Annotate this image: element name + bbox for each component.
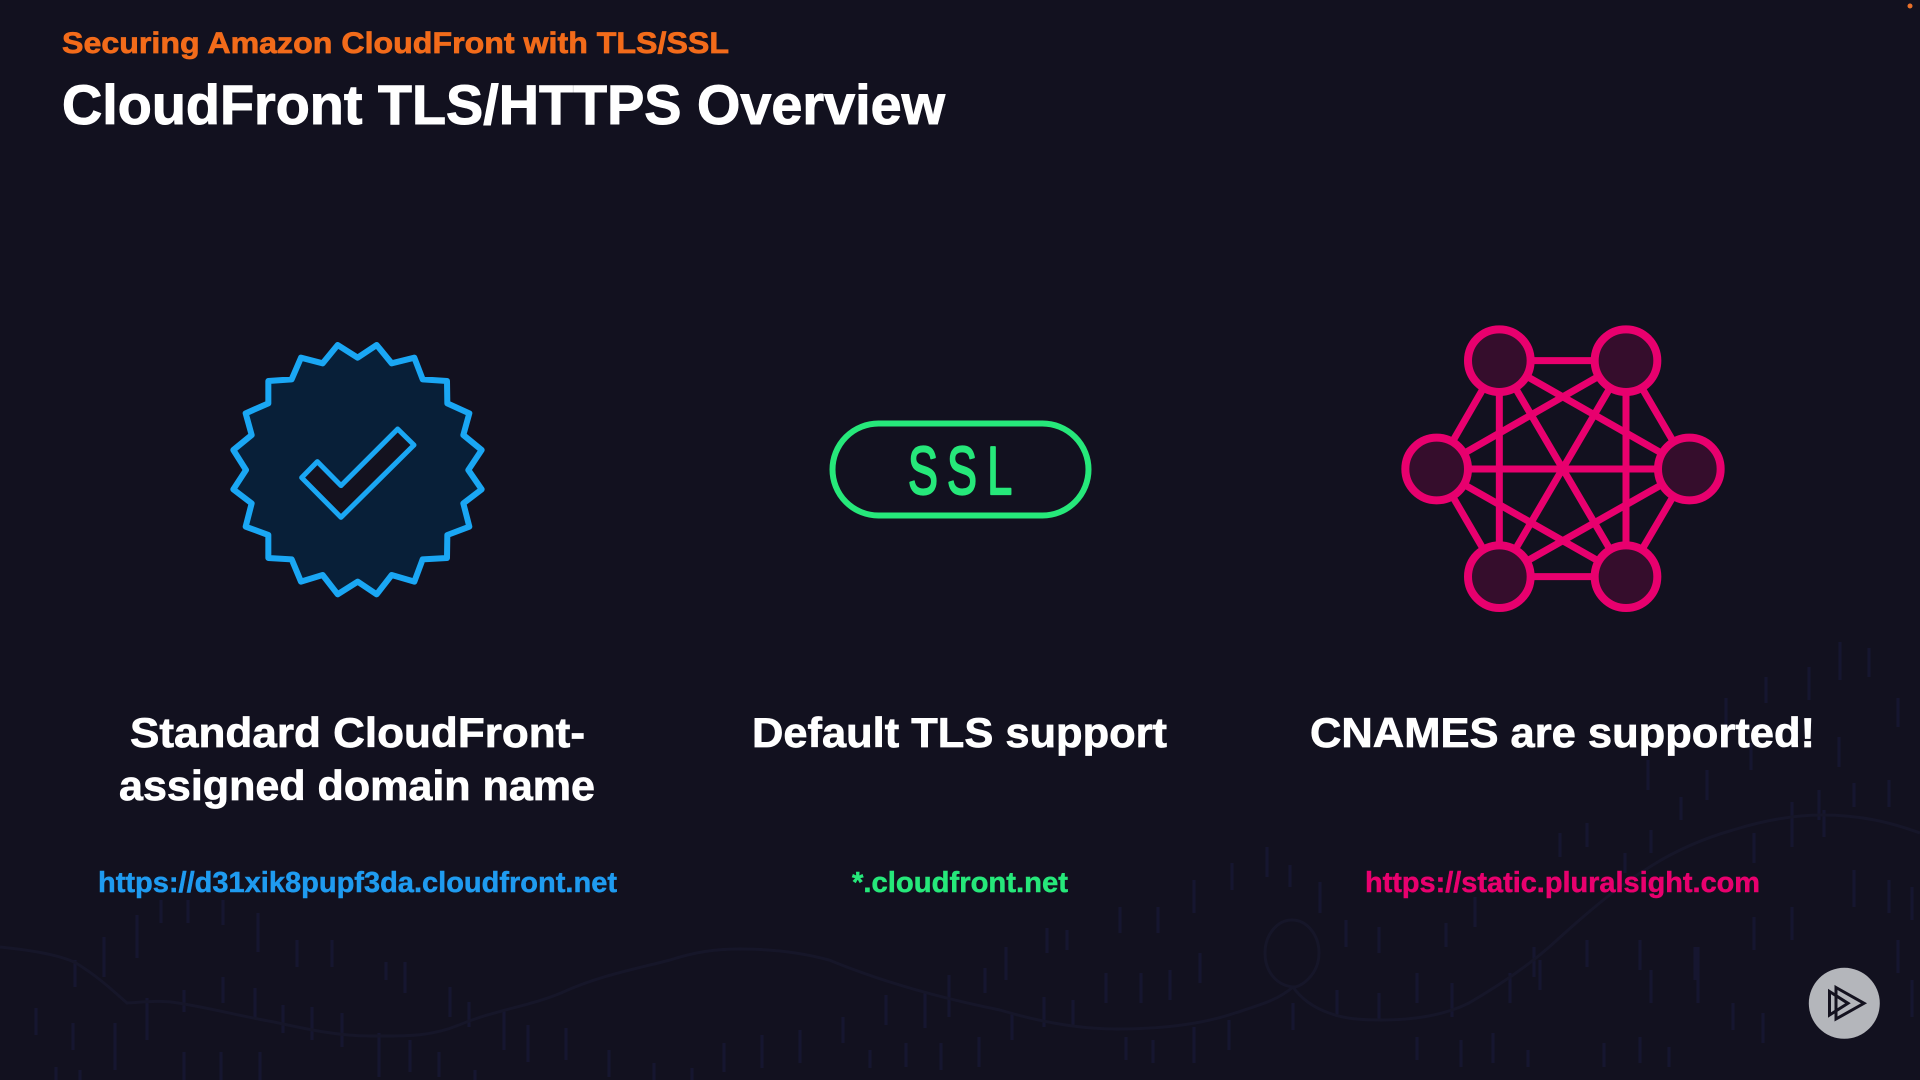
icon: play logo xyxy=(1809,968,1880,1039)
heading: standard domain xyxy=(119,709,595,809)
title: CloudFront TLS/HTTPS Overview xyxy=(62,73,945,136)
icon: check mark xyxy=(302,429,414,517)
heading: default TLS: Default TLS support xyxy=(752,709,1167,756)
icon: fully connected network xyxy=(1405,329,1721,608)
icon: SSL pill xyxy=(832,424,1088,516)
url: custom cname: https://static.pluralsight.com xyxy=(1365,867,1760,899)
heading: standard domain: assigned domain name xyxy=(119,762,595,809)
SSL label: SSL xyxy=(908,434,1012,509)
heading: CNAMES: CNAMES are supported! xyxy=(1310,709,1815,756)
subtitle: Securing Amazon CloudFront with TLS/SSL xyxy=(62,27,729,60)
icon: verified badge with check mark xyxy=(233,345,482,594)
url: wildcard: *.cloudfront.net xyxy=(852,867,1068,899)
heading: standard domain: Standard CloudFront- xyxy=(130,709,585,756)
url: cloudfront domain: https://d31xik8pupf3da.cloudfront.net xyxy=(98,867,617,899)
